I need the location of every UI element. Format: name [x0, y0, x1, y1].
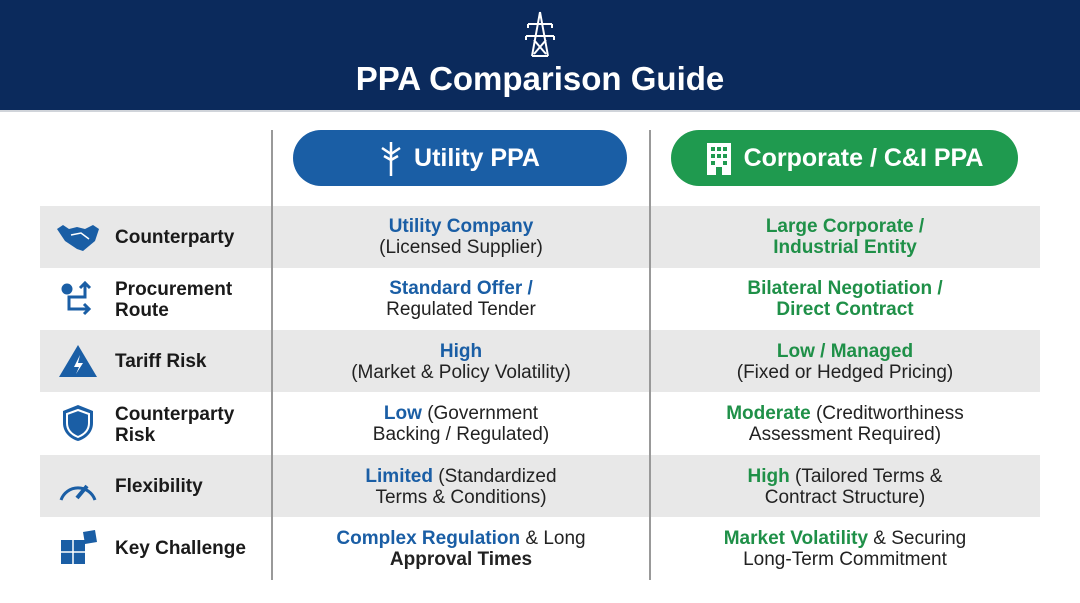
text: High: [440, 341, 482, 362]
text: Market Volatility & Securing: [724, 528, 966, 549]
pill: Corporate: Corporate / C&I PPA: [744, 144, 983, 172]
label: Counterparty Risk: Counterparty: [115, 404, 234, 425]
text: (Licensed Supplier): [379, 237, 543, 258]
text: Industrial Entity: [773, 237, 917, 258]
text: Contract Structure): [765, 487, 925, 508]
text: Utility Company: [389, 216, 533, 237]
text: Bilateral Negotiation /: [747, 278, 943, 299]
icon: gauge: [60, 484, 96, 500]
text: Long-Term Commitment: [743, 549, 947, 570]
text: Standard Offer /: [389, 278, 533, 299]
text: (Fixed or Hedged Pricing): [737, 362, 953, 383]
text: Low (Government: [384, 403, 538, 424]
text: Backing / Regulated): [373, 424, 549, 445]
icon: shield: [63, 405, 93, 441]
icon: puzzle: [61, 530, 97, 564]
pill: Utility PPA: Utility PPA: [414, 144, 540, 172]
text: Assessment Required): [749, 424, 941, 445]
label: Key Challenge: Key Challenge: [115, 538, 246, 559]
text: Low / Managed: [777, 341, 913, 362]
icon: pylon: [525, 12, 555, 57]
label: Counterparty Risk: Risk: [115, 425, 155, 446]
utility cells: [336, 216, 586, 570]
text: Approval Times: [390, 549, 532, 570]
label: Tariff Risk: Tariff Risk: [115, 351, 207, 372]
label: Flexibility: Flexibility: [115, 476, 203, 497]
pill: Corporate: [671, 130, 1018, 186]
text: Complex Regulation & Long: [336, 528, 586, 549]
icon: warning: [59, 345, 97, 377]
row backgrounds: [40, 206, 1040, 268]
icon: route: [62, 281, 91, 315]
corporate cells: [724, 216, 966, 570]
text: High (Tailored Terms &: [748, 466, 942, 487]
text: Regulated Tender: [386, 299, 536, 320]
text: (Market & Policy Volatility): [351, 362, 571, 383]
text: Moderate (Creditworthiness: [726, 403, 964, 424]
label: Counterparty: Counterparty: [115, 227, 234, 248]
text: Limited (Standardized: [365, 466, 557, 487]
icon: handshake: [57, 225, 99, 251]
pill: Utility PPA: [293, 130, 627, 186]
label: Counterparty Risk: [115, 404, 234, 446]
text: Terms & Conditions): [375, 487, 547, 508]
label: Procurement Route: Procurement: [115, 279, 232, 300]
label: Procurement Route: Route: [115, 300, 169, 321]
text: Direct Contract: [776, 299, 914, 320]
header band: [0, 0, 1080, 112]
title: PPA Comparison Guide: [356, 60, 724, 97]
text: Large Corporate /: [766, 216, 924, 237]
label: Procurement Route: [115, 279, 232, 321]
